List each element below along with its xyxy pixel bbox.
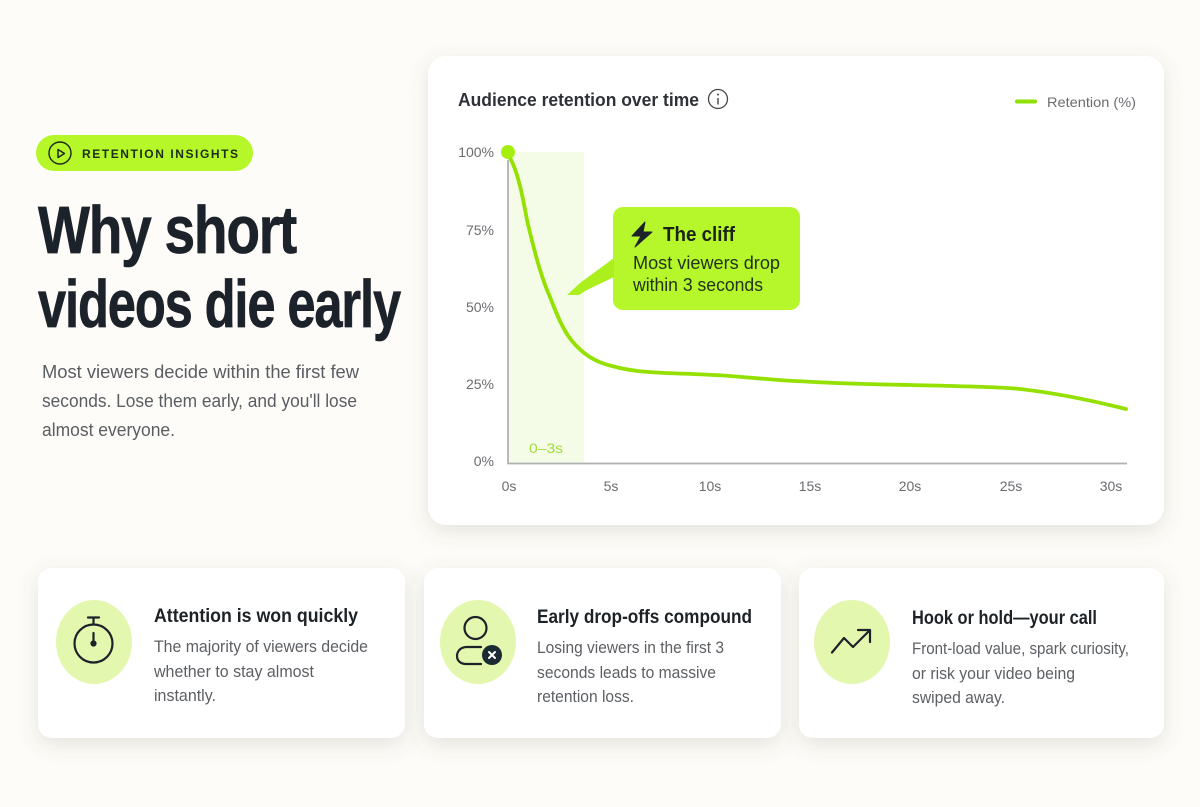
retention curve (510, 158, 1126, 409)
badge: retention insights (36, 135, 253, 171)
icon: play circle (49, 142, 71, 164)
x axis labels: 25s (1000, 478, 1022, 494)
card text (537, 607, 752, 706)
card text: Losing viewers in the first 3 (537, 639, 724, 657)
axes (508, 160, 1127, 464)
card: attention is won quickly (38, 568, 405, 738)
y axis labels: 75% (466, 222, 494, 238)
card text: Hook or hold—your call (912, 608, 1097, 629)
card text: Attention is won quickly (154, 606, 358, 627)
icon: lightning bolt (632, 222, 652, 247)
callout text: Most viewers drop (633, 253, 780, 273)
card text: swiped away. (912, 689, 1005, 707)
card text: whether to stay almost (153, 663, 314, 681)
icon: info (708, 90, 728, 108)
band label: 0–3s (529, 440, 563, 456)
intro text (42, 362, 360, 440)
icon: stopwatch (74, 618, 112, 662)
highlight band 0-3s (509, 152, 584, 463)
y axis labels: 50% (466, 299, 494, 315)
x axis labels: 20s (899, 478, 921, 494)
start point (501, 145, 515, 159)
x axis labels: 0s (502, 478, 516, 494)
title: videos die early (38, 267, 401, 342)
page content (36, 56, 1164, 738)
y axis labels: 0% (474, 453, 494, 469)
badge label: RETENTION INSIGHTS (82, 147, 238, 161)
card text (912, 608, 1129, 707)
card: early drop-offs compound (424, 568, 781, 738)
y axis labels: 25% (466, 376, 494, 392)
x axis labels (502, 478, 1122, 494)
intro text: seconds. Lose them early, and you'll lose (42, 391, 357, 411)
x axis labels: 10s (699, 478, 721, 494)
y axis labels (458, 144, 494, 469)
card text: or risk your video being (912, 665, 1075, 683)
x axis labels: 15s (799, 478, 821, 494)
callout pointer arrow (567, 258, 614, 295)
title (38, 193, 401, 342)
card text: The majority of viewers decide (154, 638, 368, 656)
icon: trending up arrow (832, 630, 870, 652)
callout text: The cliff (663, 224, 735, 246)
x axis labels: 5s (604, 478, 618, 494)
card text: Front-load value, spark curiosity, (912, 640, 1129, 658)
intro text: almost everyone. (42, 420, 175, 440)
x axis labels: 30s (1100, 478, 1122, 494)
card text: instantly. (154, 687, 216, 705)
card: hook or hold (799, 568, 1164, 738)
card text: Early drop-offs compound (537, 607, 752, 628)
card text: retention loss. (537, 688, 634, 706)
card text: seconds leads to massive (537, 664, 716, 682)
callout: the cliff (567, 207, 800, 310)
card text (153, 606, 368, 705)
callout text (632, 224, 780, 295)
callout text: within 3 seconds (632, 275, 763, 295)
intro text: Most viewers decide within the first few (42, 362, 360, 382)
panel: retention chart (428, 56, 1164, 525)
chart heading: Audience retention over time (458, 90, 699, 110)
icon: user with x badge (457, 617, 502, 665)
y axis labels: 100% (458, 144, 494, 160)
legend: Retention (%) (1047, 94, 1136, 110)
title: Why short (38, 193, 297, 268)
